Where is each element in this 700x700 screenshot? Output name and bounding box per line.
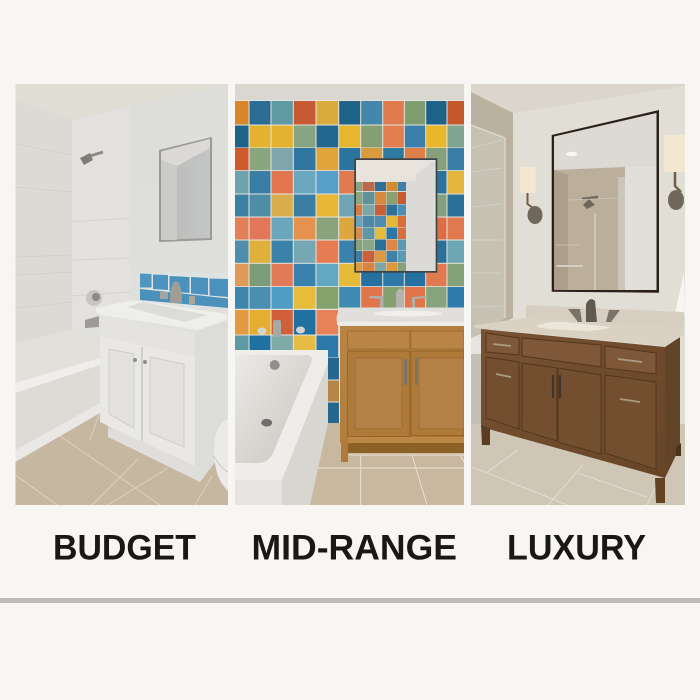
colorful tile wall <box>235 101 464 424</box>
icon: tub faucet <box>258 320 305 337</box>
divider bar <box>0 598 700 603</box>
backsplash <box>526 305 684 328</box>
wall sconce right <box>664 135 685 210</box>
countertop with sink and faucet <box>475 299 684 346</box>
floor tiles <box>471 424 685 505</box>
vanity countertop <box>336 308 464 326</box>
mirror with tile reflection <box>354 158 437 273</box>
floor tiles <box>16 412 228 505</box>
white vanity <box>100 336 200 482</box>
blue backsplash tiles <box>140 273 228 308</box>
heading: budget: BUDGET <box>53 528 196 568</box>
shower wall <box>471 92 513 338</box>
mirror <box>159 137 212 242</box>
walnut vanity <box>481 329 681 503</box>
large black framed mirror <box>552 110 659 293</box>
icon: tub valve and spout <box>85 290 102 328</box>
panel: mid-range bathroom photo <box>235 84 464 505</box>
floor tiles <box>309 423 464 505</box>
heading: mid-range: MID-RANGE <box>252 528 457 568</box>
icon: sink faucet <box>369 288 426 308</box>
icon: shower head <box>80 152 103 165</box>
oak vanity <box>340 326 464 462</box>
panel: luxury bathroom photo <box>471 84 685 505</box>
sink top <box>96 281 227 330</box>
bathtub <box>235 350 328 505</box>
wall sconce left <box>520 167 542 224</box>
panel: budget bathroom photo <box>16 84 228 505</box>
heading: luxury: LUXURY <box>507 528 646 568</box>
towel <box>675 273 685 315</box>
bathtub <box>16 338 100 448</box>
toilet <box>214 419 228 491</box>
tub edge <box>471 354 481 424</box>
